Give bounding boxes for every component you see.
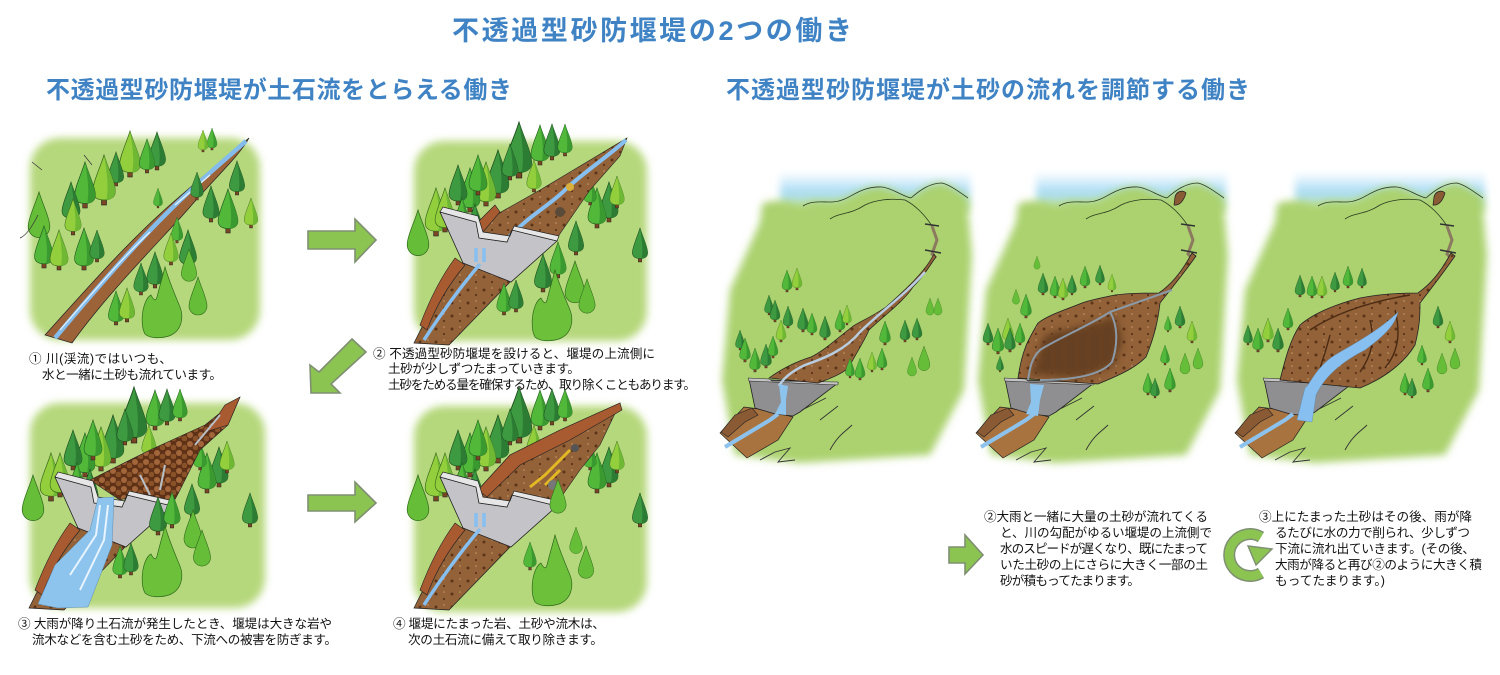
caption 1 (29, 352, 222, 382)
panel A: normal sediment state (720, 172, 972, 463)
panel 3: debris flow trapped (22, 387, 265, 610)
caption 4: ④ 堰堤にたまった岩、土砂や流木は、 (393, 617, 605, 631)
panel C: sediment eroded by water (1235, 172, 1487, 463)
caption 2 (373, 346, 696, 392)
caption 3 (18, 617, 337, 647)
panel 2: dam installed, sediment accumulates (407, 122, 648, 345)
panel 1: stream before dam (20, 128, 260, 343)
caption 3: 流木などを含む土砂をため、下流への被害を防ぎます。 (32, 632, 337, 647)
caption 2: 土砂をためる量を確保するため、取り除くこともあります。 (388, 377, 696, 392)
arrow: step 3 to 4 (308, 482, 376, 522)
caption 2: ② 不透過型砂防堰堤を設けると、堰堤の上流側に (373, 346, 655, 361)
caption: right step 2: 水のスピードが遅くなり、既にたまって (1000, 542, 1208, 556)
arrow: step 1 to 2 right (949, 535, 983, 574)
heading: debris flow capture: 不透過型砂防堰堤が土石流をとらえる働き (46, 76, 512, 104)
caption: right step 2: 砂が積もってたまります。 (1000, 574, 1140, 588)
caption: right step 3 (1259, 510, 1482, 588)
caption: right step 2: ②大雨と一緒に大量の土砂が流れてくる (984, 510, 1208, 524)
caption: right step 3: 下流に流れ出ていきます。(その後、 (1275, 542, 1475, 556)
caption 4 (393, 617, 605, 647)
arrow: step 1 to 2 (308, 219, 376, 262)
main title: 不透過型砂防堰堤の2つの働き (452, 16, 852, 46)
caption: right step 2: と、川の勾配がゆるい堰堤の上流側で (1000, 526, 1212, 540)
caption 1: 水と一緒に土砂も流れています。 (42, 368, 222, 382)
caption: right step 3: 大雨が降ると再び②のように大きく積 (1275, 558, 1482, 572)
caption: right step 3: ③上にたまった土砂はその後、雨が降 (1259, 510, 1472, 524)
caption: right step 2 (984, 510, 1212, 588)
caption 4: 次の土石流に備えて取り除きます。 (408, 633, 603, 647)
caption: right step 3: もってたまります。) (1275, 574, 1385, 588)
panel 4: sediment removed (407, 387, 648, 612)
icon: cycle arrow (1229, 534, 1272, 576)
caption: right step 3: るたびに水の力で削られ、少しずつ (1275, 526, 1470, 540)
caption: right step 2: いた土砂の上にさらに大きく一部の土 (1000, 558, 1208, 572)
panel B: heavy sediment deposit (976, 172, 1228, 463)
arrow: step 2 to 3 (310, 339, 366, 393)
heading: sediment regulation: 不透過型砂防堰堤が土砂の流れを調節する働き (726, 76, 1250, 104)
caption 1: ① 川(渓流)ではいつも、 (29, 352, 172, 366)
caption 3: ③ 大雨が降り土石流が発生したとき、堰堤は大きな岩や (18, 617, 332, 631)
caption 2: 土砂が少しずつたまっていきます。 (388, 362, 580, 376)
